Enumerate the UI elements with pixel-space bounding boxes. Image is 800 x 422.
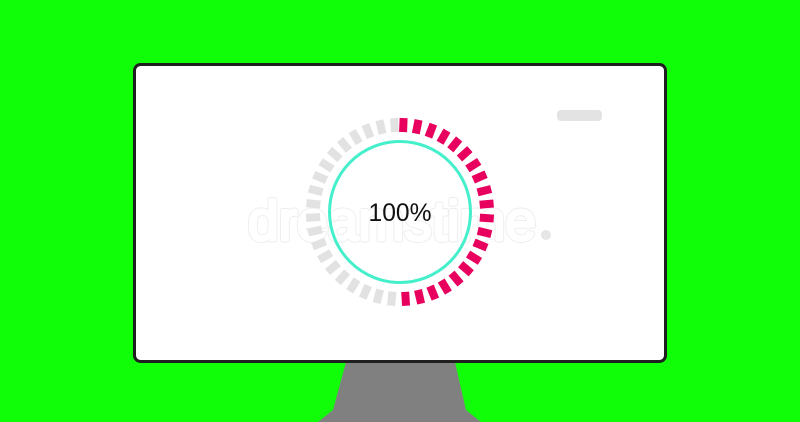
monitor screen (134, 64, 666, 362)
status pill (557, 110, 602, 121)
teal ring (330, 142, 470, 282)
watermark: dreamstime (248, 189, 536, 252)
pink progress ticks (399, 118, 494, 306)
monitor stand (318, 362, 481, 422)
watermark: dreamstime (248, 189, 536, 252)
percentage label: 100% (368, 199, 432, 227)
gray remaining ticks (306, 118, 399, 306)
